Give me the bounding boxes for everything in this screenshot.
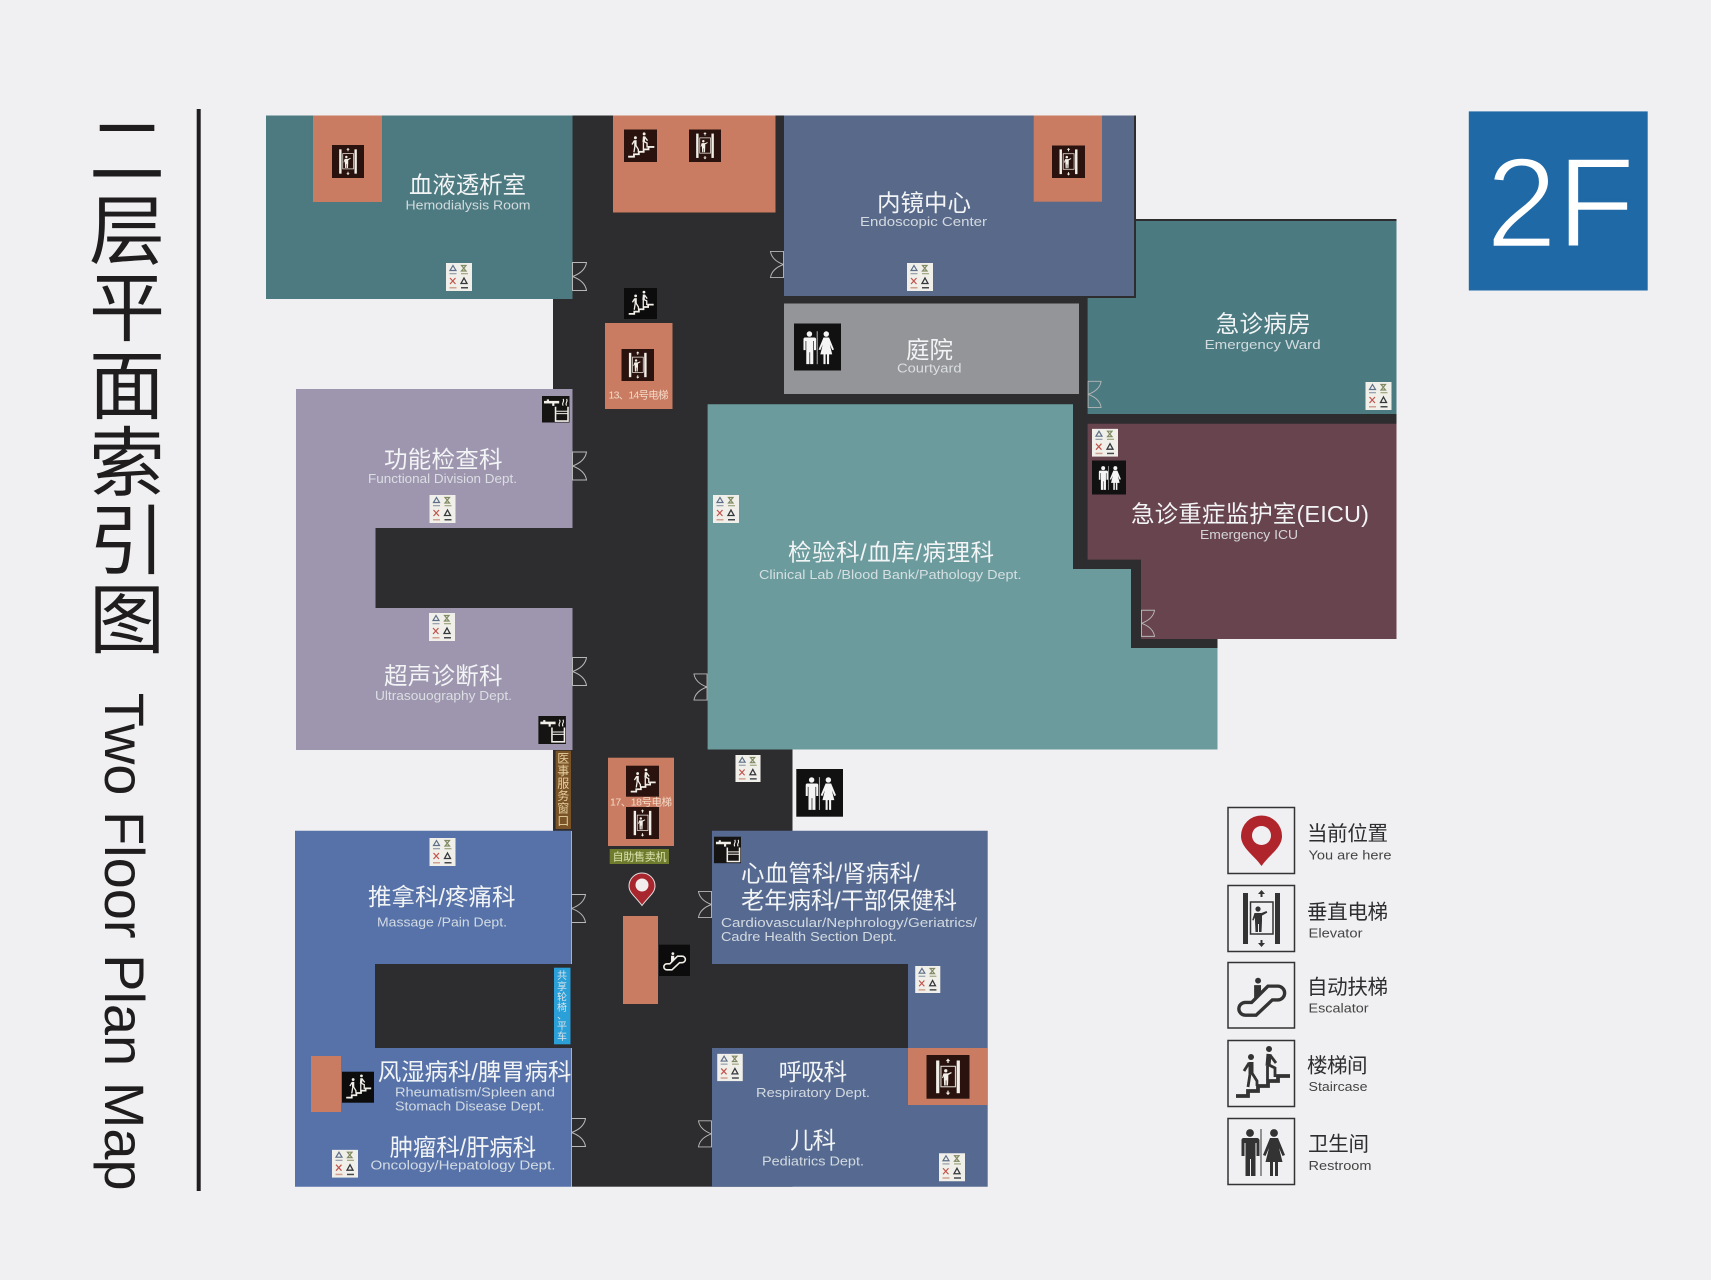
icon: elevator <box>622 349 654 381</box>
title: Chinese vertical heading: 索 <box>89 422 165 507</box>
panel: courtyard <box>784 304 1079 394</box>
stair and elevator block top <box>613 116 776 212</box>
room name: 内镜中心 <box>877 190 971 216</box>
legend: staircase: 楼梯间 <box>1307 1054 1368 1078</box>
icon: waste sorting <box>1092 429 1118 457</box>
elevator block 13 14 <box>605 323 672 409</box>
icon: elevator <box>332 145 364 178</box>
room name english line 1: Cardiovascular/Nephrology/Geriatrics/ <box>721 915 977 930</box>
room name english: Functional Division Dept. <box>368 471 517 486</box>
room name english: Ultrasouography Dept. <box>375 688 512 703</box>
icon: waste sorting <box>907 263 933 291</box>
icon: waste sorting <box>430 495 456 523</box>
elevator label: 13、14号电梯 <box>608 388 668 402</box>
icon: waste sorting <box>713 495 739 523</box>
panel: emergency ward <box>1088 221 1396 414</box>
legend: you are here <box>1228 808 1392 874</box>
wheelchair label: 轮 <box>557 990 567 1004</box>
escalator block <box>623 916 658 1004</box>
room name: 庭院 <box>906 337 953 363</box>
room name: 推拿科/疼痛科 <box>368 884 516 910</box>
icon: staircase <box>624 130 657 162</box>
panel: clinical lab <box>708 404 1218 750</box>
icon: elevator <box>1052 146 1085 178</box>
icon: waste sorting <box>430 838 456 866</box>
icon: waste sorting <box>429 613 455 641</box>
legend: you are here: You are here <box>1308 848 1392 862</box>
room name: 检验科/血库/病理科 <box>788 540 994 566</box>
panel: endoscopic center <box>784 116 1134 296</box>
room name line 1: 心血管科/肾病科/ <box>741 860 920 886</box>
wheelchair label: 共 <box>557 970 567 982</box>
room name english: Endoscopic Center <box>860 214 988 229</box>
title: Chinese vertical heading: 引 <box>89 500 165 585</box>
title: Chinese vertical heading: 层 <box>89 190 165 275</box>
legend: restroom: 卫生间 <box>1308 1133 1369 1156</box>
doors <box>572 251 1155 1147</box>
wheelchair label: 椅 <box>557 1001 567 1014</box>
elevator label: 17、18号电梯 <box>610 796 672 808</box>
wheelchair label: 、 <box>557 1011 567 1022</box>
icon: escalator <box>659 945 690 976</box>
room name english line 2: Cadre Health Section Dept. <box>721 929 897 944</box>
service window label: 服 <box>557 776 569 790</box>
room name english: Oncology/Hepatology Dept. <box>370 1158 556 1172</box>
legend: restroom <box>1228 1118 1372 1184</box>
elevator block <box>908 1048 988 1105</box>
room name: 急诊重症监护室(EICU) <box>1131 501 1369 527</box>
service window label: 窗 <box>557 802 569 816</box>
room name: 肿瘤科/肝病科 <box>390 1134 536 1160</box>
icon: waste sorting <box>446 263 472 291</box>
legend: elevator: 垂直电梯 <box>1307 901 1388 924</box>
icon: you are here pin <box>629 873 655 906</box>
vending machine label: 自助售卖机 <box>612 850 666 864</box>
icon: waste sorting <box>939 1153 965 1181</box>
title: Chinese vertical heading <box>89 110 165 664</box>
service window label: 口 <box>557 814 569 828</box>
icon: hot water <box>714 837 741 863</box>
2F floor badge: 2F <box>1486 132 1635 275</box>
icon: restroom <box>1092 460 1126 494</box>
icon: elevator <box>926 1055 970 1099</box>
icon: staircase <box>626 766 659 797</box>
icon: staircase <box>342 1072 374 1103</box>
wheelchair label: 车 <box>557 1030 567 1043</box>
title divider line <box>197 109 201 1191</box>
2F floor badge <box>1469 111 1648 291</box>
icon: hot water <box>538 716 566 744</box>
icon: waste sorting corridor <box>735 755 761 782</box>
room name: 超声诊断科 <box>384 663 502 689</box>
wheelchair label: 平 <box>557 1022 567 1032</box>
service window label: 务 <box>557 788 569 803</box>
icon: elevator <box>626 807 659 839</box>
title: Chinese vertical heading: 图 <box>89 579 165 664</box>
panel: hemodialysis room <box>266 116 572 299</box>
room name: 儿科 <box>790 1128 836 1154</box>
panel: massage, rheumatism, oncology <box>295 831 572 1187</box>
corridors: dark floor area <box>375 116 1396 1187</box>
icon: restroom <box>794 324 841 370</box>
icon: hot water <box>542 396 570 422</box>
room name: 血液透析室 <box>409 172 526 198</box>
room name english: Respiratory Dept. <box>756 1085 870 1100</box>
legend: escalator <box>1228 962 1388 1028</box>
room name english: Clinical Lab /Blood Bank/Pathology Dept. <box>759 567 1022 582</box>
room name: 急诊病房 <box>1216 311 1311 337</box>
wheelchair label <box>554 968 570 1044</box>
icon: waste sorting <box>915 966 940 993</box>
room name english: Emergency ICU <box>1200 527 1298 542</box>
room name: 功能检查科 <box>384 446 502 472</box>
title: Chinese vertical heading: 二 <box>89 110 165 195</box>
service window label <box>556 751 571 829</box>
room name line 2: 老年病科/干部保健科 <box>741 888 957 914</box>
icon: restroom corridor <box>796 769 843 817</box>
panel: cardiology, respiratory, pediatrics <box>712 831 988 1187</box>
elevator block <box>313 116 382 202</box>
legend: escalator: Escalator <box>1308 1000 1369 1016</box>
title: Chinese vertical heading: 平 <box>89 267 165 352</box>
icon: staircase in corridor <box>624 288 657 319</box>
elevator block 17 18 <box>608 758 674 846</box>
room name: 风湿病科/脾胃病科 <box>378 1059 571 1085</box>
elevator block <box>1034 116 1102 202</box>
legend <box>1228 808 1392 1184</box>
panel: functional division and ultrasound <box>296 389 572 750</box>
panel: emergency ICU <box>1088 424 1396 639</box>
room name english: Emergency Ward <box>1205 337 1321 352</box>
room name english: Massage /Pain Dept. <box>377 914 507 930</box>
room name english: Pediatrics Dept. <box>762 1154 864 1168</box>
legend: restroom: Restroom <box>1308 1158 1372 1173</box>
title: English rotated heading: Two Floor Plan Map <box>93 693 156 1191</box>
title: Chinese vertical heading: 面 <box>89 345 165 430</box>
legend: elevator <box>1228 886 1388 952</box>
room name english: Courtyard <box>897 360 962 376</box>
icon: waste sorting <box>332 1150 358 1178</box>
legend: staircase: Staircase <box>1308 1079 1368 1094</box>
room name english: Rheumatism/Spleen and <box>395 1084 555 1100</box>
icon: waste sorting <box>1366 382 1392 410</box>
icon: waste sorting <box>717 1054 743 1081</box>
legend: escalator: 自动扶梯 <box>1307 976 1388 999</box>
service window label: 事 <box>557 764 569 778</box>
room name: 呼吸科 <box>779 1059 847 1085</box>
legend: you are here: 当前位置 <box>1307 822 1388 846</box>
icon: elevator <box>689 130 721 162</box>
stair block <box>311 1056 341 1112</box>
room name english: Hemodialysis Room <box>406 198 530 212</box>
service window label: 医 <box>557 752 569 766</box>
legend: staircase <box>1228 1040 1368 1106</box>
wheelchair label: 享 <box>557 980 567 993</box>
legend: elevator: Elevator <box>1308 926 1363 940</box>
room name english line 2: Stomach Disease Dept. <box>395 1098 544 1114</box>
